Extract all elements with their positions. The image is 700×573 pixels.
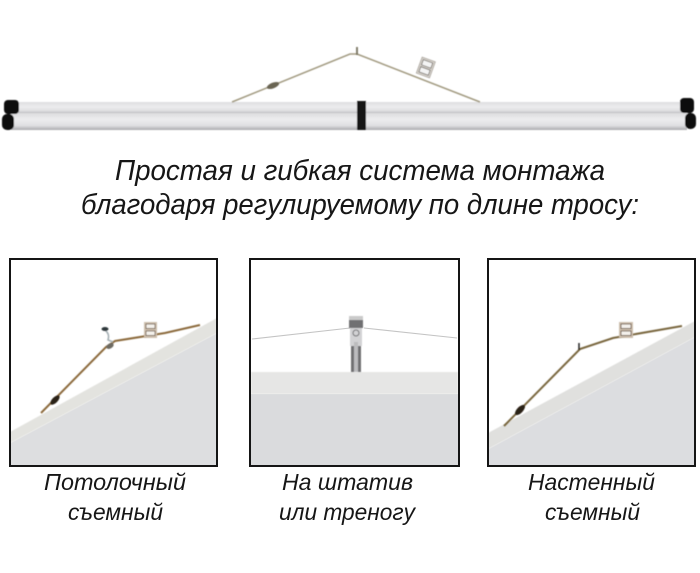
panel: tripod mount	[250, 259, 459, 466]
cable	[504, 326, 682, 426]
heading: Простая и гибкая система монтажа	[115, 155, 605, 187]
caption: wall: съемный	[545, 499, 640, 525]
caption: tripod	[279, 469, 416, 525]
roller	[10, 318, 217, 443]
left end caps	[2, 100, 19, 130]
suspension cable	[232, 47, 480, 102]
product photo: two rollers with adjustable cable	[2, 47, 696, 130]
caption: ceiling: съемный	[68, 499, 163, 525]
panel: ceiling mount	[10, 259, 217, 466]
cable	[41, 325, 200, 413]
heading: благодаря регулируемому по длине тросу:	[81, 189, 639, 221]
cable tag	[619, 322, 633, 338]
cable tag	[416, 57, 435, 78]
heading	[81, 155, 639, 221]
upper roller tube	[14, 102, 682, 114]
caption: ceiling	[44, 469, 186, 525]
panel frame	[10, 259, 217, 466]
caption: tripod: На штатив	[282, 469, 413, 495]
screen surface	[251, 394, 458, 466]
lower roller tube	[11, 113, 687, 130]
panel frame	[488, 259, 695, 466]
roller	[251, 372, 458, 394]
centre strap	[357, 101, 366, 130]
caption: wall: Настенный	[528, 469, 655, 495]
ceiling hook	[102, 327, 113, 342]
right end caps	[680, 98, 696, 129]
roller	[488, 321, 695, 449]
panel frame	[250, 259, 459, 466]
cable tag	[144, 322, 157, 338]
caption: wall	[528, 469, 655, 525]
cable	[252, 328, 457, 339]
tripod bracket	[349, 316, 363, 372]
screen surface	[10, 333, 217, 466]
panel: wall mount	[488, 259, 695, 466]
caption: tripod: или треногу	[279, 499, 416, 525]
screen surface	[488, 337, 695, 466]
caption: ceiling: Потолочный	[44, 469, 186, 495]
